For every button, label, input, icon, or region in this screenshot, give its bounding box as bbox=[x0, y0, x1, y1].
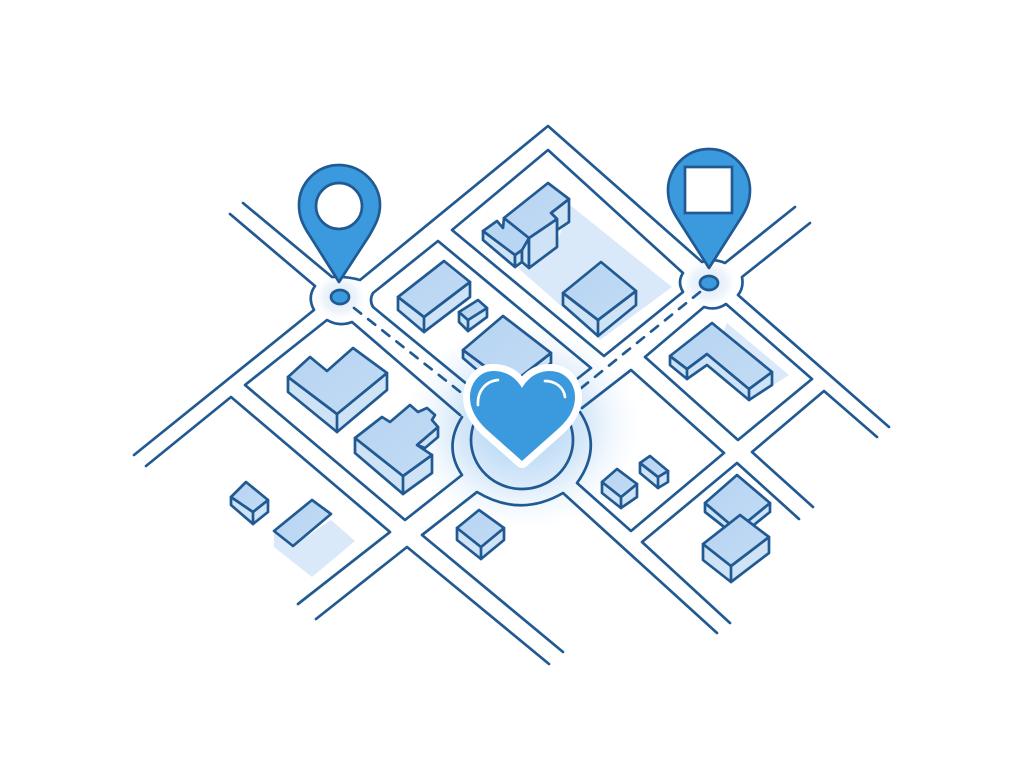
block: L-building bbox=[645, 304, 812, 440]
building: small cube center right bbox=[602, 469, 637, 508]
block: far right bbox=[752, 391, 877, 507]
block: lower left bbox=[146, 397, 390, 604]
location dot: left bbox=[331, 290, 349, 304]
map pin: square bbox=[668, 149, 750, 268]
block: center right bbox=[577, 370, 724, 531]
road: upper left edge bbox=[134, 214, 315, 455]
map pin: circle bbox=[299, 165, 380, 282]
building: near heart bbox=[463, 316, 551, 398]
roundabout inner ring bbox=[471, 391, 573, 489]
building: small block center right bbox=[640, 456, 668, 488]
road network bbox=[134, 126, 889, 664]
location dot: right bbox=[700, 276, 718, 290]
road: top outer edge bbox=[243, 126, 795, 280]
heart highlight left bbox=[478, 380, 498, 405]
building: rear block lower right bbox=[705, 475, 770, 532]
building: stepped left block bbox=[355, 405, 438, 494]
building: top center complex bbox=[483, 183, 569, 268]
road: bottom left edge bbox=[316, 547, 549, 664]
block: lower right bbox=[642, 463, 799, 623]
building: L-shaped block bbox=[670, 323, 772, 400]
building: notched left block bbox=[288, 348, 387, 432]
halo: right intersection bbox=[679, 257, 739, 309]
halo: left intersection bbox=[312, 272, 368, 322]
block: left center bbox=[245, 320, 462, 520]
building: small block bbox=[459, 300, 487, 331]
dashed route: right pin to heart bbox=[580, 292, 700, 389]
building: long block bbox=[398, 261, 470, 332]
building: cube below roundabout bbox=[457, 510, 504, 559]
building: small cube bottom left bbox=[231, 482, 268, 524]
building: cube top center bbox=[563, 262, 636, 336]
block: top center bbox=[452, 150, 683, 356]
heart marker bbox=[470, 371, 575, 461]
building: front block lower right bbox=[703, 515, 769, 582]
building: flat bottom left bbox=[274, 500, 331, 546]
glow around heart bbox=[404, 320, 640, 530]
block: bottom center bbox=[422, 492, 717, 652]
ground shadows bbox=[274, 205, 789, 577]
dashed route: left pin to heart bbox=[354, 308, 468, 398]
block: route side center bbox=[371, 241, 591, 385]
road: right outer edge bbox=[738, 223, 889, 427]
heart highlight right bbox=[545, 381, 565, 397]
